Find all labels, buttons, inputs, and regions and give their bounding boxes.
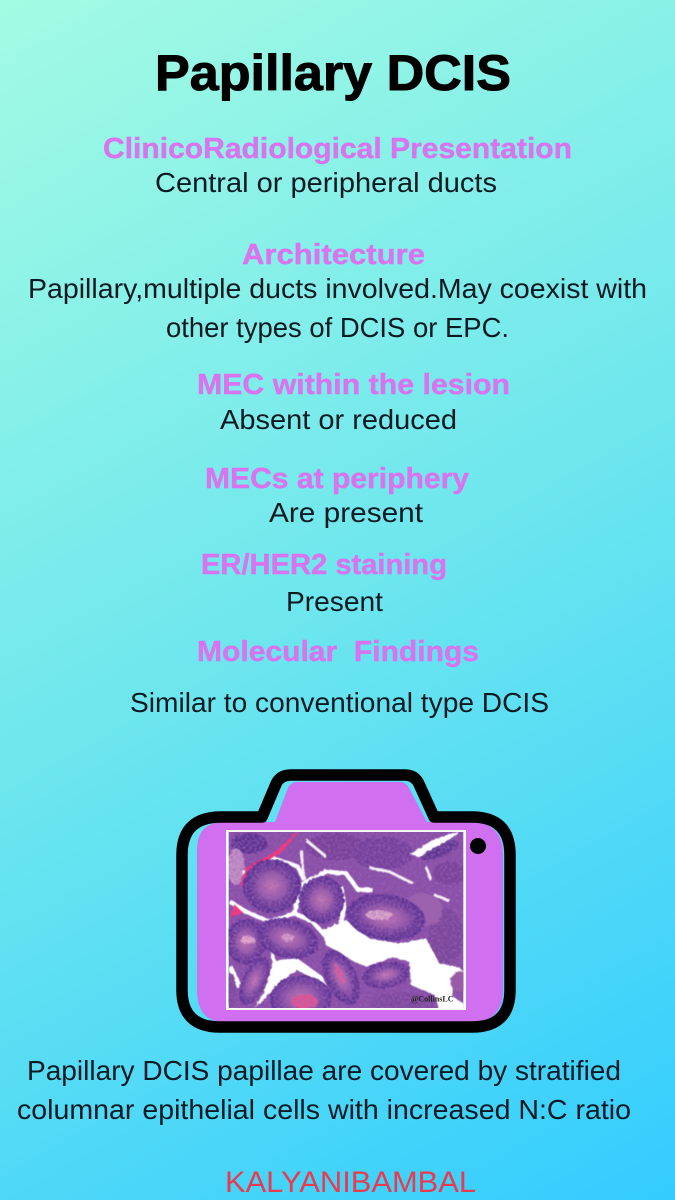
caption line 2: columnar epithelial cells with increased N:C ratio (17, 1094, 631, 1125)
text: similar to conventional type DCIS: Similar to conventional type DCIS (130, 687, 549, 718)
heading: MEC within the lesion: MEC within the lesion (197, 369, 510, 401)
text: absent or reduced: Absent or reduced (220, 404, 457, 435)
section: clinicoradiological presentation (103, 133, 572, 198)
section: MECs at periphery (205, 463, 469, 528)
camera illustration (182, 775, 510, 1027)
heading: molecular findings: Molecular Findings (197, 636, 479, 668)
heading: architecture: Architecture (242, 239, 425, 271)
text: architecture line 2: other types of DCIS or EPC. (166, 312, 509, 343)
image credit: @CollinsLC (411, 995, 454, 1004)
heading: MECs at periphery: MECs at periphery (205, 463, 469, 495)
heading: clinicoradiological presentation: ClinicoRadiological Presentation (103, 133, 572, 165)
heading: ER/HER2 staining: ER/HER2 staining (201, 549, 447, 581)
title: Papillary DCIS (155, 45, 511, 101)
section: MEC within the lesion (197, 369, 510, 435)
author credit: KALYANIBAMBAL (225, 1166, 476, 1199)
camera black outline (182, 775, 510, 1027)
section: molecular findings (130, 636, 549, 718)
tissue background (228, 832, 464, 1008)
section: architecture (28, 239, 647, 343)
caption (17, 1055, 631, 1125)
histology micrograph (223, 827, 469, 1021)
papillae (228, 859, 464, 1008)
caption line 1: Papillary DCIS papillae are covered by stratified (27, 1055, 621, 1086)
text: architecture line 1: Papillary,multiple ducts involved.May coexist with (28, 273, 647, 304)
text: central or peripheral ducts: Central or peripheral ducts (155, 167, 497, 198)
camera purple fill (197, 782, 503, 1022)
lumen channels and vessels (229, 832, 466, 1012)
text: are present: Are present (269, 497, 423, 528)
camera lens dot (470, 838, 486, 854)
text: present: Present (286, 586, 383, 617)
section: ER/HER2 staining (201, 549, 447, 617)
